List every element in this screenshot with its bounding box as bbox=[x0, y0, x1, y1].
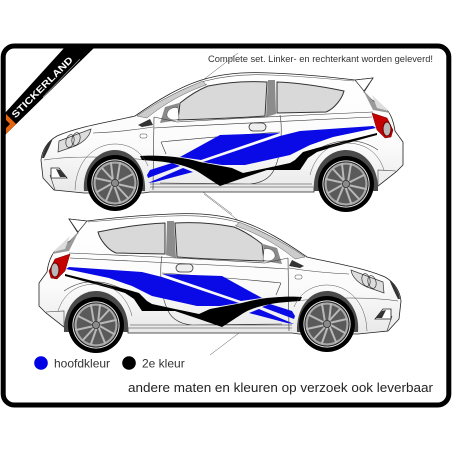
bottom note: andere maten en kleuren op verzoek ook leverbaar bbox=[128, 381, 433, 395]
logo text: STICKERLAND bbox=[10, 55, 76, 121]
car: right side view bbox=[39, 194, 401, 355]
frame bbox=[3, 46, 449, 405]
legend: second colour: 2e kleur bbox=[142, 356, 185, 370]
car: left side view bbox=[41, 53, 403, 214]
legend: second colour bbox=[122, 356, 185, 370]
logo chevron bbox=[6, 114, 16, 134]
top note: Complete set. Linker- en rechterkant worden geleverd! bbox=[208, 53, 433, 64]
legend: main colour: hoofdkleur bbox=[54, 356, 110, 370]
logo band bbox=[5, 47, 95, 135]
